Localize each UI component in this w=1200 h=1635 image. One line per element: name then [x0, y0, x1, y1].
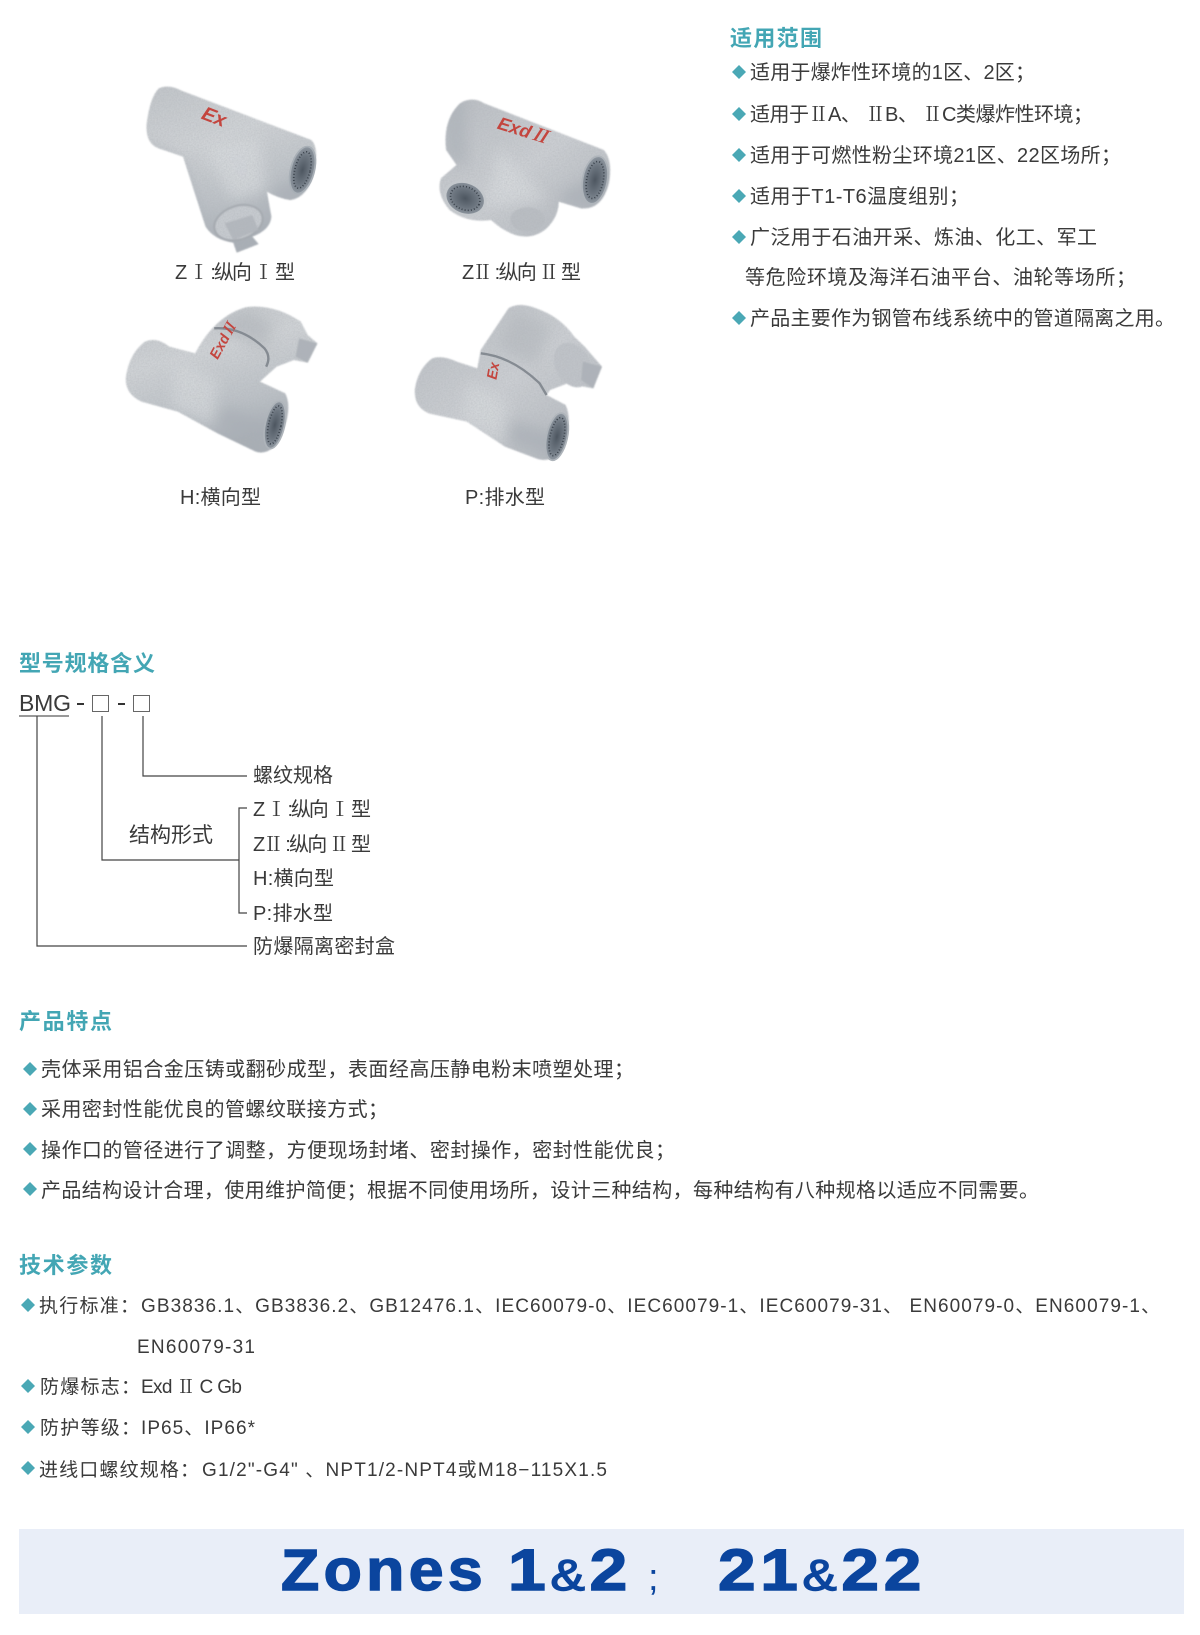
parameter: protection class: 防护等级： — [40, 1417, 140, 1439]
parameter: thread spec: G1/2"-G4" 、NPT1/2-NPT4或M18−115X1.5 — [202, 1459, 607, 1481]
parameter: protection class — [21, 1417, 256, 1439]
parameter: protection class: IP65、IP66* — [141, 1418, 256, 1439]
icon: H transverse type fitting: ExdⅡ — [204, 317, 242, 362]
parameter: explosion marking: Exd Ⅱ C Gb — [141, 1372, 242, 1399]
list item 5: 等危险环境及海洋石油平台、油轮等场所； — [745, 266, 1136, 289]
label: ZI type: Z Ⅰ :纵向 Ⅰ 型 — [175, 256, 295, 285]
label: P type: P:排水型 — [465, 486, 545, 509]
panel: scope of application — [730, 26, 1175, 330]
label: ZII type: ZⅡ :纵向 Ⅱ 型 — [462, 256, 581, 285]
label: ZII: ZⅡ :纵向 Ⅱ 型 — [253, 828, 371, 857]
heading: features: 产品特点 — [19, 1009, 112, 1034]
list item 6: 产品主要作为钢管布线系统中的管道隔离之用。 — [750, 307, 1175, 330]
icon: ZI longitudinal type fitting — [142, 87, 320, 253]
icon: P drainage type fitting — [415, 305, 602, 462]
parameter: thread spec: 进线口螺纹规格： — [39, 1459, 199, 1481]
list item 5 — [732, 226, 1136, 289]
model code: BMG — [19, 690, 71, 716]
list item 1: 适用于爆炸性环境的1区、2区； — [750, 61, 1035, 84]
banner text: 21 &22 — [718, 1538, 926, 1603]
banner text: 1&2 — [508, 1538, 632, 1603]
label: P: P:排水型 — [253, 902, 333, 925]
label: H: H:横向型 — [253, 867, 334, 890]
connector diagram — [37, 716, 247, 946]
heading: parameters: 技术参数 — [19, 1253, 112, 1278]
label: thread spec: 螺纹规格 — [253, 764, 333, 787]
parameter: standards: GB3836.1、GB3836.2、GB12476.1、IEC60079-0、IEC60079-1、IEC60079-31、 EN60079-0、EN60079-1、 — [141, 1296, 1160, 1317]
label: H type: H:横向型 — [180, 486, 261, 509]
feature 2: 采用密封性能优良的管螺纹联接方式； — [41, 1098, 388, 1121]
banner text: ; — [648, 1557, 659, 1599]
list item 4: 适用于T1-T6温度组别； — [750, 185, 969, 208]
panel: technical parameters — [19, 1253, 1160, 1481]
parameter: thread spec — [21, 1459, 607, 1481]
parameter: standards — [21, 1295, 1160, 1358]
feature 4: 产品结构设计合理，使用维护简便；根据不同使用场所，设计三种结构，每种结构有八种规格以适应不同需要。 — [41, 1179, 1039, 1202]
icon: ZII longitudinal type fitting — [439, 100, 612, 237]
label: enclosure: 防爆隔离密封盒 — [253, 935, 395, 958]
feature 3: 操作口的管径进行了调整，方便现场封堵、密封操作，密封性能优良； — [41, 1139, 675, 1162]
parameter: standards: 执行标准： — [39, 1295, 139, 1317]
panel: model meaning — [19, 651, 395, 958]
heading: model meaning: 型号规格含义 — [19, 651, 155, 676]
banner: zones — [19, 1529, 1184, 1614]
list item 5: 广泛用于石油开采、炼油、化工、军工 — [750, 226, 1097, 249]
model code — [19, 690, 150, 716]
list item 3: 适用于可燃性粉尘环境21区、22区场所； — [750, 144, 1121, 167]
banner text: Zones — [281, 1538, 487, 1603]
feature 1: 壳体采用铝合金压铸或翻砂成型，表面经高压静电粉末喷塑处理； — [41, 1058, 634, 1081]
banner text — [281, 1538, 926, 1603]
parameter: explosion marking: 防爆标志： — [40, 1376, 140, 1398]
icon: ZI longitudinal type fitting: Ex — [198, 103, 231, 132]
parameter: standards: EN60079-31 — [137, 1337, 255, 1358]
list item 2: 适用于ⅡA、 ⅡB、 ⅡC类爆炸性环境； — [750, 98, 1093, 127]
icon: P drainage type fitting: Ex — [484, 360, 504, 381]
heading: scope: 适用范围 — [730, 26, 822, 51]
label: ZI: Z Ⅰ :纵向 Ⅰ 型 — [253, 793, 371, 822]
icon: H transverse type fitting — [126, 307, 317, 453]
panel: product photos — [125, 86, 611, 462]
label: structure form: 结构形式 — [129, 824, 213, 847]
parameter: explosion marking — [21, 1372, 242, 1399]
panel: product features — [19, 1009, 1039, 1202]
icon: ZII longitudinal type fitting: ExdⅡ — [494, 110, 554, 150]
